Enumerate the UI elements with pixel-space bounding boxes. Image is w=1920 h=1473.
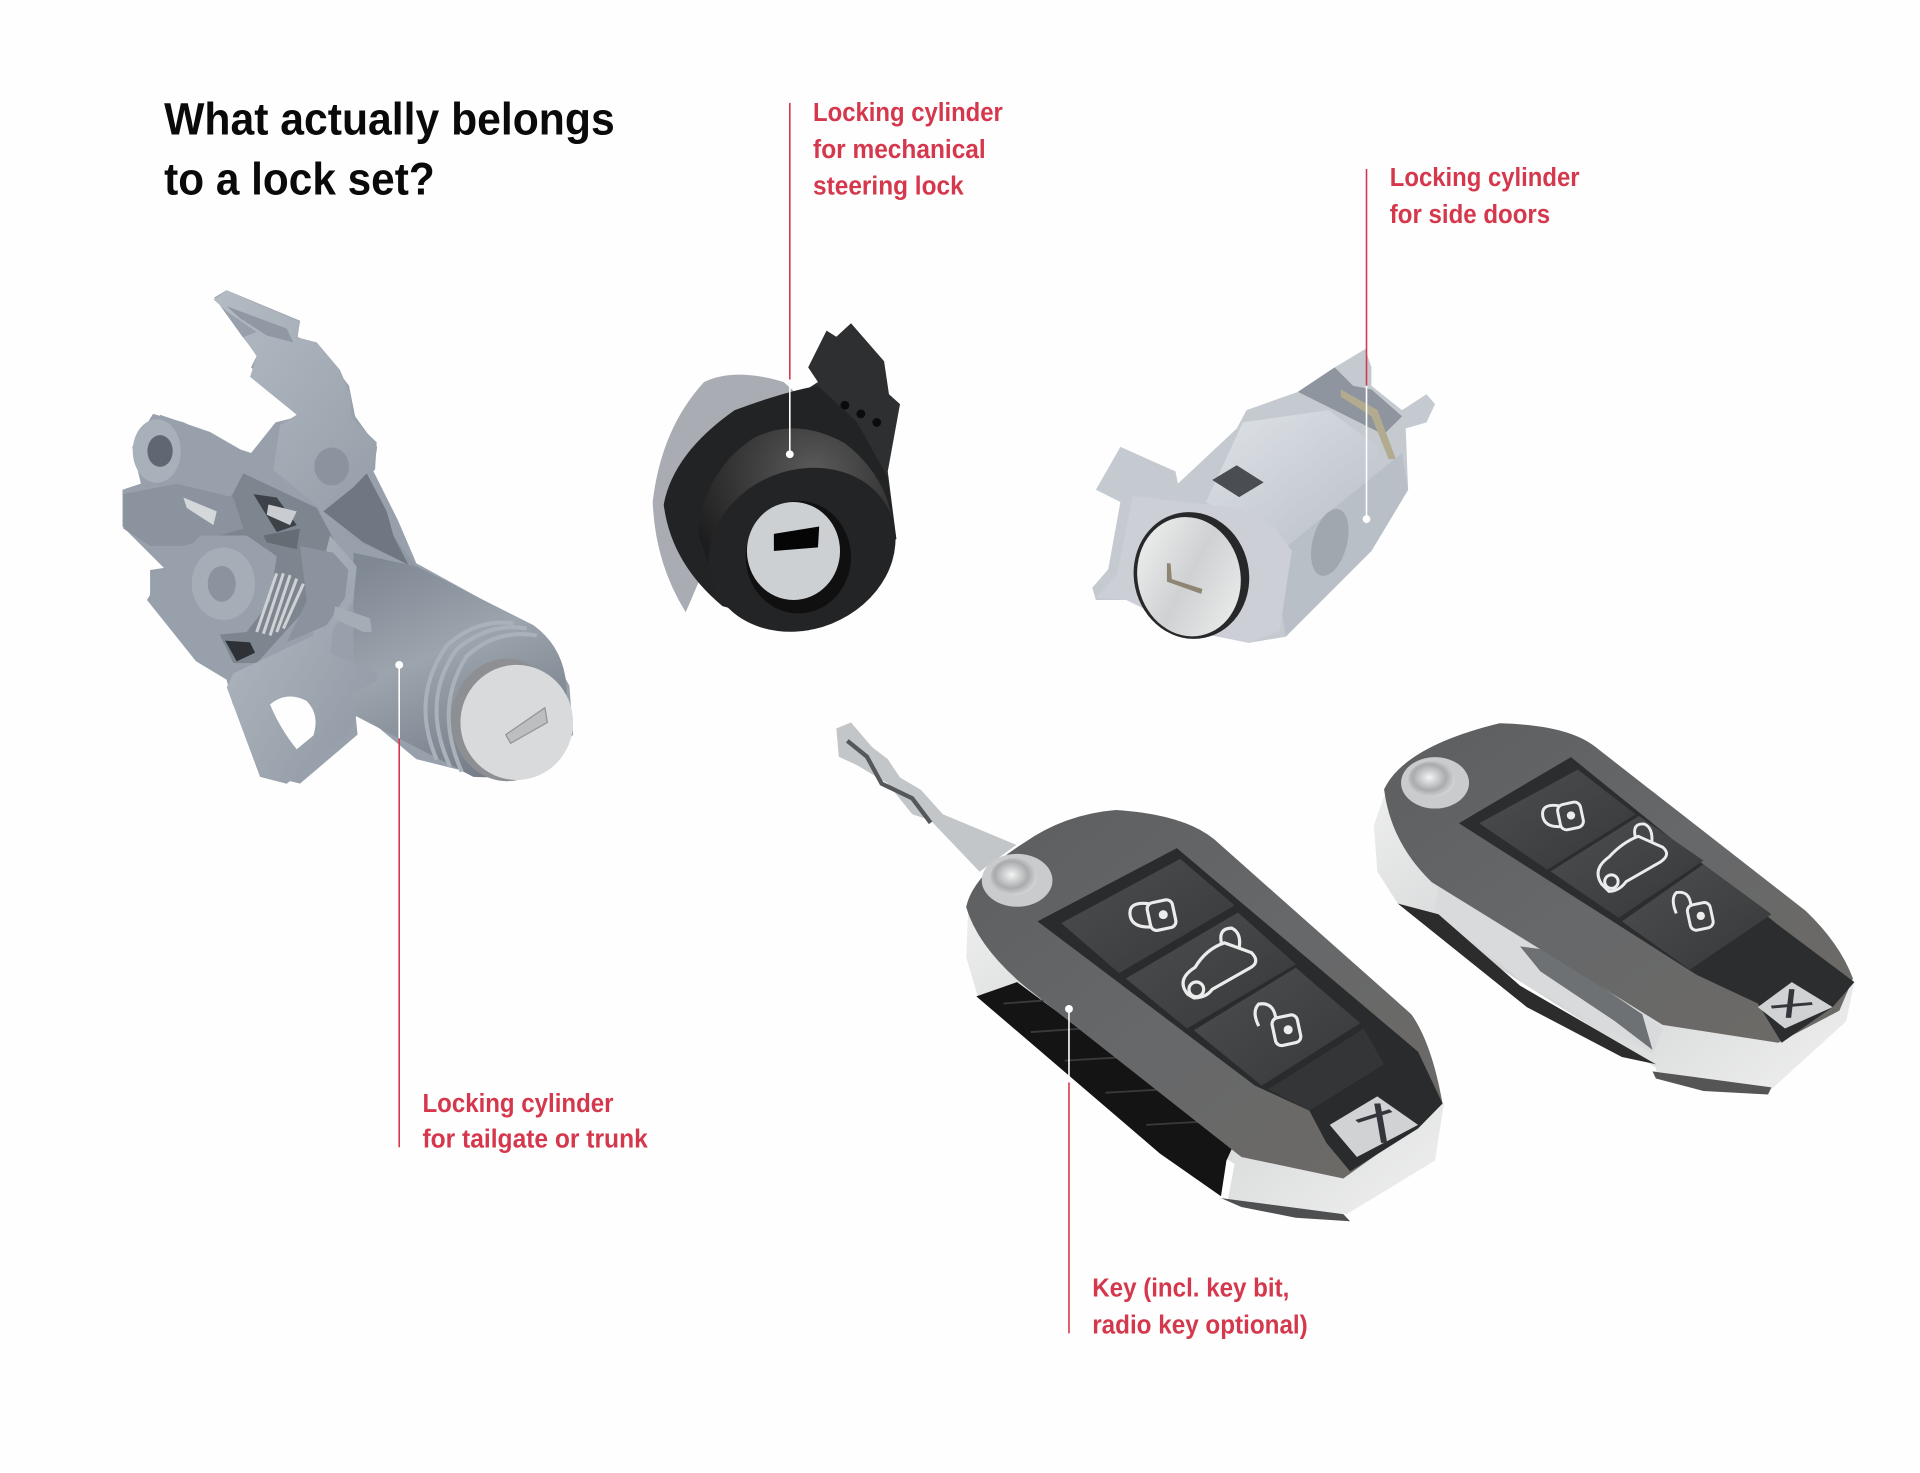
product: steering lock cylinder: [653, 323, 920, 659]
silhouette: [122, 290, 573, 784]
silhouette: [1092, 349, 1435, 643]
key slot chrome: [1330, 1096, 1418, 1157]
barrel: [353, 553, 567, 777]
connector: [784, 323, 900, 575]
connector holes: [840, 401, 881, 427]
leader: steering lock: [786, 103, 794, 458]
product: folded radio key: [1374, 723, 1854, 1095]
end cylinder: [150, 415, 240, 491]
collar neck: [698, 428, 891, 600]
label: side doors: for side doors: [1390, 199, 1550, 229]
silver face: [747, 502, 840, 600]
key slot chrome: [1758, 982, 1833, 1028]
title: [164, 94, 615, 205]
key blade: [836, 722, 1016, 872]
unlock icon: [1255, 1004, 1302, 1047]
label: steering lock: steering lock: [813, 171, 964, 201]
label: tailgate: for tailgate or trunk: [422, 1123, 648, 1153]
bracket hole: [270, 697, 316, 749]
buttons: [1479, 770, 1771, 970]
label: steering lock: [813, 97, 1003, 201]
chrome back shell: [1374, 723, 1854, 1089]
black collar: [664, 386, 896, 631]
button panel: [1459, 757, 1854, 1043]
product: side door locking cylinder: [1092, 349, 1435, 650]
label: tailgate: [422, 1088, 648, 1153]
label: steering lock: Locking cylinder: [813, 97, 1003, 127]
buttons: [1061, 859, 1384, 1111]
side window: [1304, 505, 1355, 580]
lock icon: [1543, 801, 1585, 831]
leader: side doors: [1363, 169, 1370, 523]
title: to a lock set?: [164, 154, 435, 205]
car icon: [1598, 824, 1667, 891]
chrome back shell: [966, 843, 1444, 1214]
coil spring: [257, 573, 303, 635]
gray shell: [966, 810, 1443, 1178]
side block: [123, 484, 243, 546]
latch notch: [1212, 465, 1264, 497]
small spring: [263, 529, 300, 549]
label: steering lock: for mechanical: [813, 134, 986, 164]
unlock icon: [1673, 892, 1714, 931]
silver rear housing: [653, 375, 808, 612]
car icon: [1183, 928, 1256, 998]
lever pivot hole: [314, 448, 349, 485]
mechanism interior: [200, 473, 333, 663]
leader: tailgate: [395, 661, 403, 1147]
brass rings: [1341, 389, 1396, 459]
peg: [333, 606, 372, 632]
label: side doors: [1390, 162, 1580, 229]
button panel: [1038, 848, 1443, 1171]
product: folding radio key with blade: [836, 722, 1444, 1221]
chrome cap: [1126, 507, 1252, 646]
barrel grooves: [425, 623, 537, 772]
label: key: Key (incl. key bit,: [1092, 1273, 1289, 1303]
label: key: [1092, 1273, 1308, 1339]
interior ribs: [1004, 1000, 1207, 1125]
title: What actually belongs: [164, 94, 615, 145]
chrome lock face: [452, 659, 573, 781]
L-shaped key slot: [1167, 563, 1202, 594]
black interior: [976, 982, 1235, 1196]
label: key: radio key optional): [1092, 1309, 1308, 1339]
folded blade: [1520, 946, 1653, 1050]
main body highlight: [1206, 410, 1384, 551]
black interior: [1398, 904, 1656, 1064]
bracket plate: [227, 535, 377, 784]
top clip shading: [1298, 367, 1402, 435]
label: side doors: Locking cylinder: [1390, 162, 1580, 192]
product: tailgate locking cylinder: [122, 290, 573, 784]
front plate: [1096, 496, 1292, 643]
gray shell: [1384, 723, 1853, 1043]
lower dark edge: [1221, 1198, 1350, 1221]
lower dark edge: [1653, 1071, 1771, 1095]
pin: [1401, 757, 1469, 809]
front flange: [684, 440, 920, 659]
pin: [982, 854, 1052, 907]
side face: [1273, 453, 1408, 637]
upper lever: [213, 291, 417, 567]
key slot: [774, 527, 819, 551]
inner ring: [746, 501, 851, 613]
leader: key: [1065, 1005, 1073, 1333]
label: tailgate: Locking cylinder: [422, 1088, 613, 1118]
rotary cam: [150, 535, 277, 635]
lock icon: [1130, 899, 1177, 932]
black ring: [1122, 501, 1261, 650]
